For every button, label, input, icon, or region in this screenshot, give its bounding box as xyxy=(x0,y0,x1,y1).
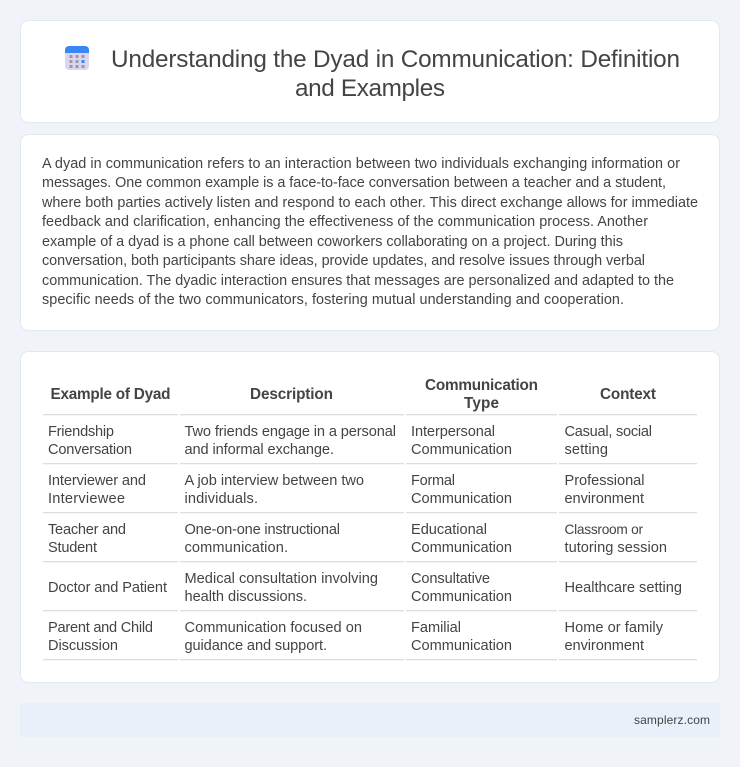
table row: Parent and Child Discussion: Communication focused on xyxy=(184,620,362,636)
table row: Interviewer and Interviewee: Formal xyxy=(411,473,455,489)
icon: calendar xyxy=(65,46,89,70)
table row: Interviewer and Interviewee: environment xyxy=(564,491,644,507)
table row: Teacher and Student xyxy=(48,522,667,556)
table row: Doctor and Patient: Communication xyxy=(411,589,512,605)
table row: Doctor and Patient: Healthcare setting xyxy=(564,580,682,596)
table row: Teacher and Student: Classroom or xyxy=(564,522,643,537)
table row: Doctor and Patient: Doctor and Patient xyxy=(48,580,167,596)
header: Example of Dyad: Example of Dyad xyxy=(50,386,170,403)
text block: definition paragraph: messages. One common example is a face-to-face conversation between a teacher and a student, xyxy=(42,175,666,191)
table row: Teacher and Student: Educational xyxy=(411,522,487,538)
table row: Friendship Conversation: Casual, social xyxy=(564,424,652,440)
table row: Friendship Conversation: Conversation xyxy=(48,442,132,458)
text block: definition paragraph: where both parties actively listen and respond to each other. This direct exchange allows for immediate xyxy=(41,195,698,211)
header: Description: Description xyxy=(250,386,333,403)
table row: Friendship Conversation: setting xyxy=(564,442,608,458)
table row: Teacher and Student: Communication xyxy=(411,540,512,556)
table row: Friendship Conversation: Communication xyxy=(411,442,512,458)
table row: Parent and Child Discussion: Discussion xyxy=(48,638,118,654)
table row: Friendship Conversation xyxy=(48,424,652,458)
title: and Examples xyxy=(295,75,445,102)
text block: definition paragraph: conversation, both participants share ideas, provide updates, and resolve issues through verbal xyxy=(42,253,645,269)
table row: Teacher and Student: tutoring session xyxy=(564,540,667,556)
table row: Parent and Child Discussion: Home or family xyxy=(564,620,664,636)
header: Communication Type: Communication xyxy=(425,377,538,394)
table row: Parent and Child Discussion: Communication xyxy=(411,638,512,654)
table row: Parent and Child Discussion: guidance and support. xyxy=(184,638,327,654)
footer text: samplerz.com: samplerz.com xyxy=(634,713,710,727)
footer xyxy=(20,703,720,737)
table row: Doctor and Patient: health discussions. xyxy=(184,589,307,605)
table row: Friendship Conversation: Friendship xyxy=(48,424,114,440)
table row: Doctor and Patient: Consultative xyxy=(411,571,490,587)
text block: definition paragraph: example of a dyad is a phone call between coworkers collaborating on a project. During this xyxy=(42,234,623,250)
table row: Interviewer and Interviewee: individuals. xyxy=(184,491,258,507)
table row: Doctor and Patient xyxy=(48,571,682,605)
text block: definition paragraph: communication. The dyadic interaction ensures that messages are personalized and adapted to the xyxy=(42,273,674,289)
title: Understanding the Dyad in Communication: Definition xyxy=(111,46,680,73)
table row: Parent and Child Discussion: Familial xyxy=(411,620,461,636)
panel: title card xyxy=(20,20,720,122)
table row: Teacher and Student: communication. xyxy=(184,540,288,556)
text block: definition paragraph: feedback and clarification, enhancing the effectiveness of the communication process. Another xyxy=(42,214,648,230)
table row: Parent and Child Discussion: environment xyxy=(564,638,644,654)
table row: Teacher and Student: One-on-one instructional xyxy=(184,522,340,538)
table row: Interviewer and Interviewee xyxy=(48,473,644,507)
text block: definition paragraph: specific needs of the two communicators, fostering mutual understanding and cooperation. xyxy=(42,292,624,308)
text block: definition paragraph xyxy=(41,156,698,308)
panel: intro paragraph xyxy=(20,134,720,330)
table row: Interviewer and Interviewee: Professional xyxy=(564,473,644,489)
table row: Friendship Conversation: Two friends engage in a personal xyxy=(184,424,396,440)
table header xyxy=(50,377,656,412)
header: Communication Type: Type xyxy=(464,395,499,412)
panel: table card xyxy=(20,352,720,682)
table row: Doctor and Patient: Medical consultation involving xyxy=(184,571,378,587)
table row: Friendship Conversation: Interpersonal xyxy=(411,424,495,440)
table row: Teacher and Student: Teacher and xyxy=(48,522,126,538)
table row: Interviewer and Interviewee: A job interview between two xyxy=(184,473,364,489)
table row: Friendship Conversation: and informal exchange. xyxy=(184,442,334,458)
table row: Teacher and Student: Student xyxy=(48,540,97,556)
header: Communication Type xyxy=(425,377,538,412)
table row: Interviewer and Interviewee: Interviewee xyxy=(48,491,125,507)
table row: Parent and Child Discussion xyxy=(48,620,664,654)
table row: Interviewer and Interviewee: Interviewer and xyxy=(48,473,146,489)
title xyxy=(111,46,680,102)
table row: Parent and Child Discussion: Parent and Child xyxy=(48,620,153,636)
header: Context: Context xyxy=(600,386,656,403)
text block: definition paragraph: A dyad in communication refers to an interaction between two individuals exchanging information or xyxy=(42,156,680,172)
table row: Interviewer and Interviewee: Communication xyxy=(411,491,512,507)
